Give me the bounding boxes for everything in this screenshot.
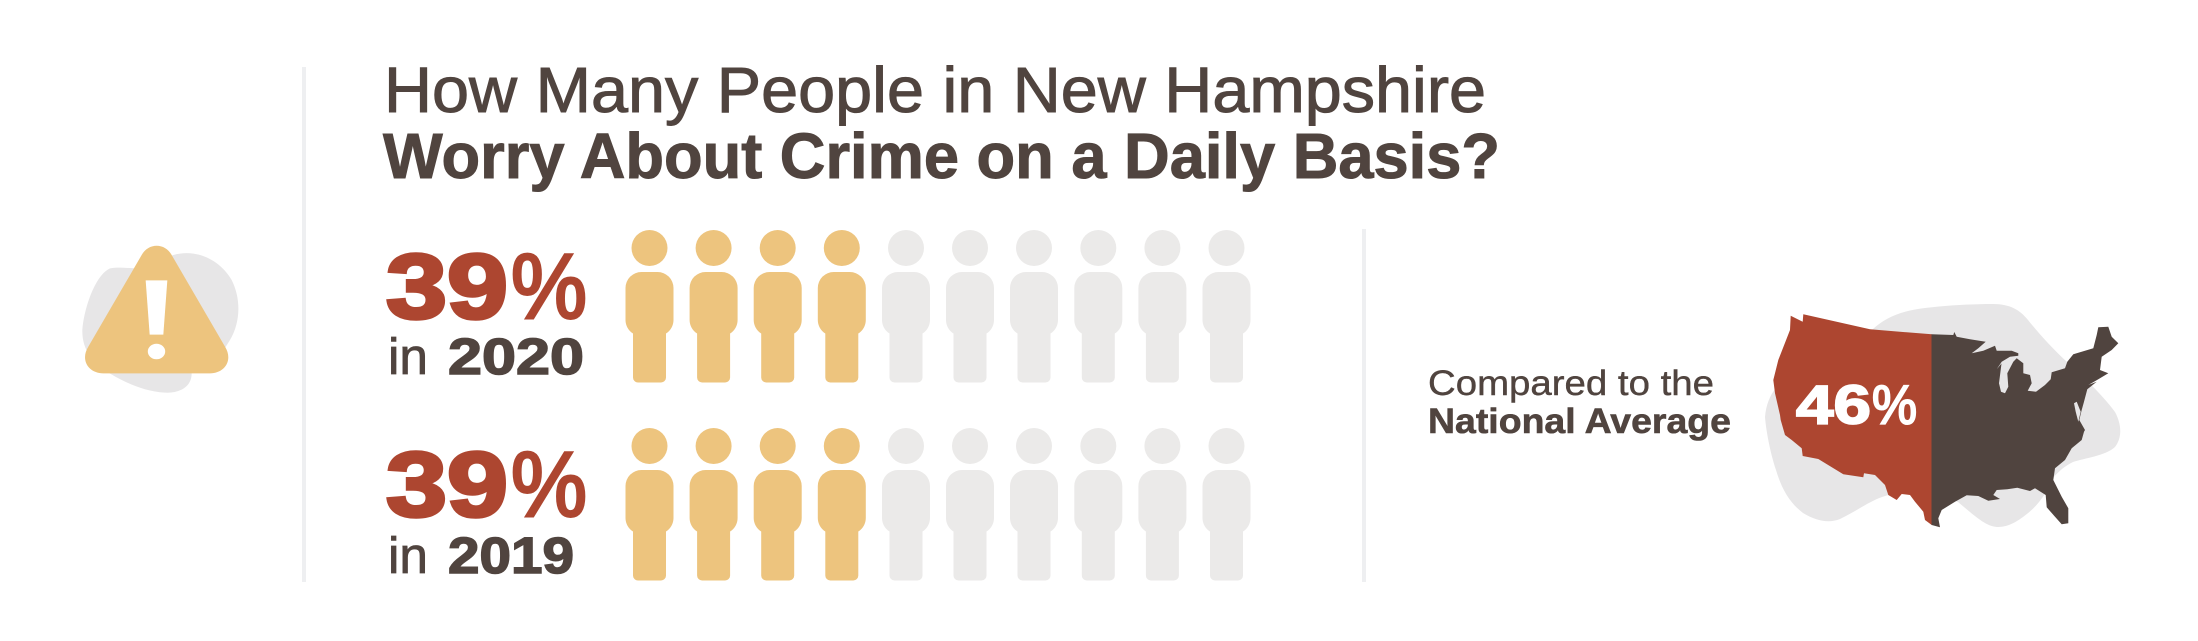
icon: warning triangle — [82, 246, 238, 393]
39 value 2019: 39 — [386, 434, 508, 536]
percent sign 2019: % — [511, 434, 587, 536]
caption line 1: Compared to the — [1428, 364, 1714, 403]
title — [383, 54, 1500, 192]
exclamation mark — [146, 280, 167, 335]
year 2019: 2019 — [448, 527, 574, 584]
39 value 2020: 39 — [386, 236, 508, 338]
stat: 2019 — [386, 434, 587, 584]
right divider — [1362, 229, 1366, 582]
percent sign 2020: % — [511, 236, 587, 338]
left divider — [302, 67, 306, 582]
warning background blob — [82, 253, 238, 393]
46 value: 46 — [1796, 374, 1871, 436]
chesapeake bay — [2074, 402, 2081, 422]
warning triangle shape — [85, 246, 228, 373]
percent sign: % — [1872, 374, 1917, 436]
title line 1: How Many People in New Hampshire — [384, 54, 1486, 126]
pictogram row 2019: 4 of 10 highlighted — [626, 428, 1250, 580]
US map with national average — [1765, 304, 2120, 527]
national average caption — [1428, 364, 1731, 441]
in 2020 label: in — [388, 328, 428, 385]
year 2020: 2020 — [448, 328, 584, 385]
stat: 2020 — [386, 236, 587, 385]
map background blob — [1765, 304, 2120, 527]
map east half — [1932, 326, 2118, 528]
pictogram row 2020: 4 of 10 highlighted — [626, 230, 1250, 382]
in 2019 label: in — [388, 527, 428, 584]
caption line 2: National Average — [1428, 402, 1731, 441]
infographic canvas — [82, 65, 2120, 582]
title line 2: Worry About Crime on a Daily Basis? — [383, 120, 1500, 192]
map west half — [1773, 314, 1932, 526]
